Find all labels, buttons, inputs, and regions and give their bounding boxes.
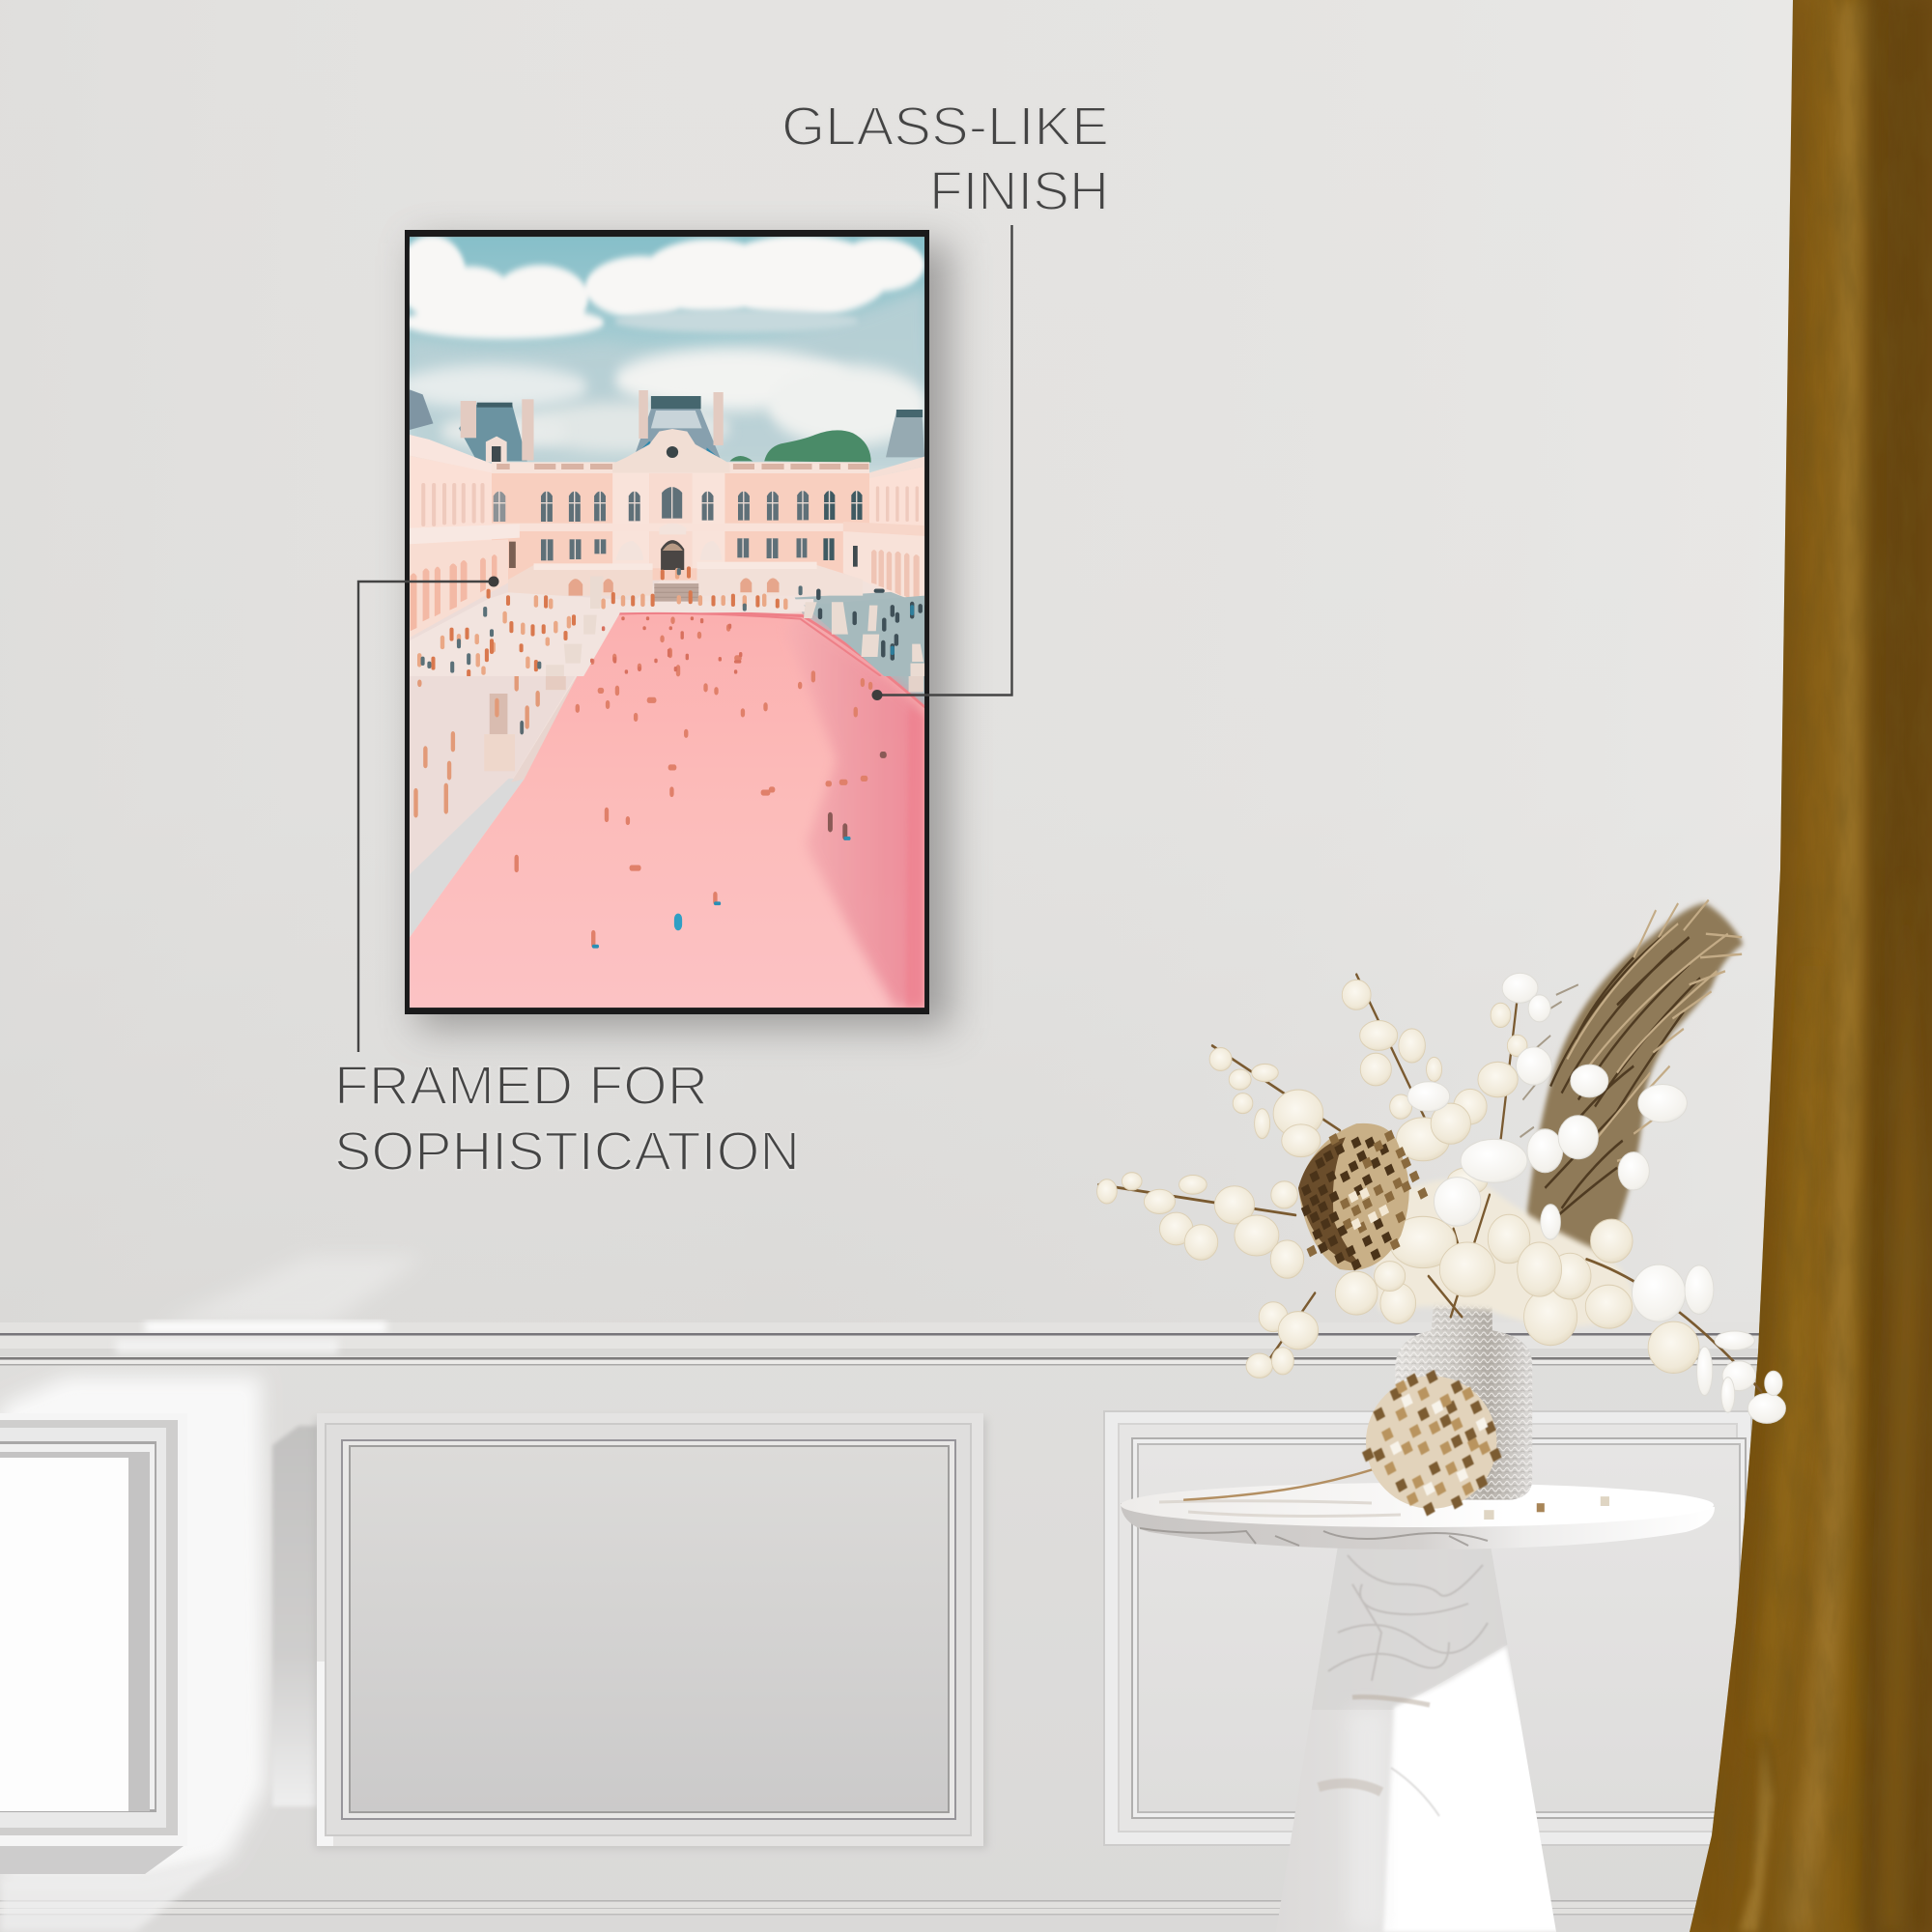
near swimmers	[592, 618, 741, 672]
pediment	[616, 429, 726, 462]
pedestal	[1276, 1546, 1570, 1932]
pool rim	[610, 612, 924, 707]
bouquet in vase	[1097, 900, 1785, 1500]
door	[661, 540, 684, 570]
black frame	[405, 230, 929, 1014]
picture shadow	[417, 243, 951, 1028]
chair rail	[0, 1321, 1932, 1366]
right wing	[869, 457, 924, 478]
panel: centre moulding	[315, 1413, 987, 1849]
roofs	[410, 389, 924, 461]
table	[1121, 1483, 1715, 1932]
picture: palace facade	[410, 389, 924, 676]
leader line and dot	[871, 225, 1012, 700]
framed picture	[397, 230, 929, 1014]
pool shadow	[784, 613, 924, 1008]
windows	[494, 487, 863, 568]
pool	[410, 613, 924, 1008]
right deck	[794, 591, 924, 708]
label: FRAMED FOR	[334, 1055, 708, 1117]
left wing	[410, 435, 492, 473]
pool rim	[620, 613, 881, 676]
trees	[730, 430, 871, 463]
left deck	[410, 576, 668, 882]
upper deck	[410, 592, 813, 676]
balustrade	[492, 462, 869, 473]
statues reliefs	[616, 524, 722, 560]
wall	[0, 0, 1932, 1323]
cream mass	[1376, 1179, 1634, 1327]
terrace	[508, 562, 863, 602]
wainscoting	[0, 1256, 1932, 1932]
label: SOPHISTICATION	[334, 1121, 800, 1182]
pool edge stone	[410, 779, 525, 937]
vase	[1395, 1296, 1532, 1500]
light patch	[0, 1256, 425, 1932]
pampas plume	[1520, 900, 1744, 1270]
facade	[410, 429, 924, 638]
curtain folds	[1681, 0, 1932, 1932]
people crowd	[419, 568, 921, 675]
statue plinth	[485, 676, 923, 771]
white leaves	[1407, 973, 1785, 1423]
picture: sky and pool	[397, 236, 927, 1008]
sky	[397, 236, 927, 473]
people on lower deck	[416, 675, 538, 814]
label: GLASS-LIKE	[781, 96, 1109, 157]
fallen petals	[1484, 1496, 1609, 1520]
leader line and dot	[358, 576, 498, 1052]
baseboard	[0, 1900, 1932, 1915]
callout: glass-like finish	[781, 96, 1109, 700]
ball petals	[1362, 1370, 1502, 1517]
branch stems	[1098, 975, 1761, 1391]
dried hydrangea on table	[1183, 1370, 1609, 1520]
curtain	[1681, 0, 1932, 1932]
callout: framed for sophistication	[334, 576, 800, 1182]
lunaria leaves	[1097, 980, 1699, 1378]
window mullions	[494, 487, 863, 560]
label: FINISH	[929, 160, 1109, 222]
swimmers	[517, 619, 884, 947]
hydrangea large	[1298, 1123, 1428, 1270]
table top	[1121, 1483, 1715, 1549]
panel: left moulding	[0, 1413, 187, 1846]
dormer	[486, 437, 507, 462]
statues	[546, 577, 924, 676]
panel: right moulding	[1104, 1411, 1751, 1845]
